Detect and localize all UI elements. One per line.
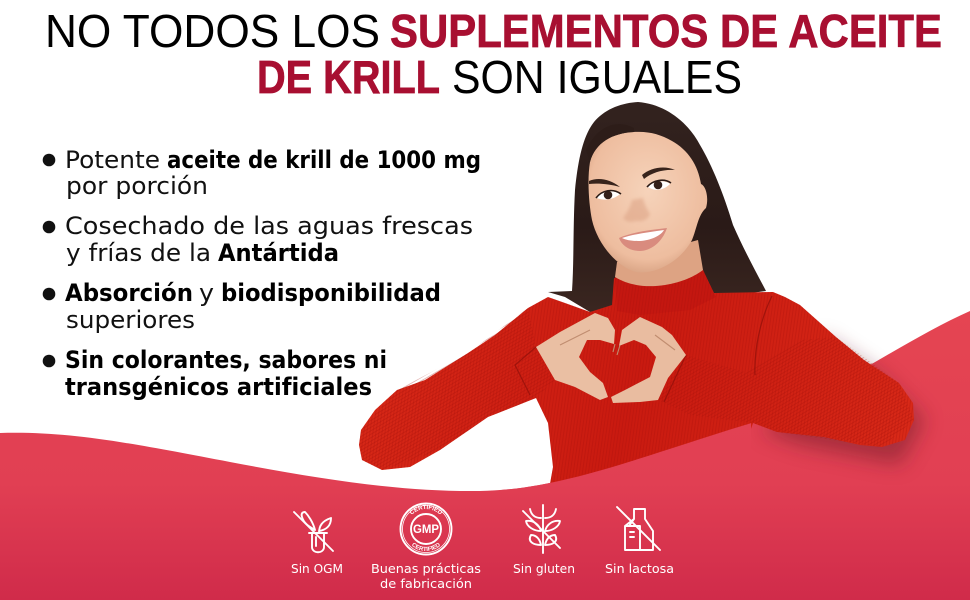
label: Sin OGM: Sin OGM xyxy=(291,561,343,576)
icon: Sin lactosa xyxy=(605,507,674,576)
eyes xyxy=(596,180,671,200)
bullet: potent krill oil: por porción xyxy=(66,172,208,200)
hands xyxy=(536,313,686,403)
title: DE KRILL xyxy=(257,51,440,103)
sleeve folds xyxy=(515,296,772,402)
eyebrows xyxy=(589,168,675,187)
benefits list xyxy=(43,146,481,401)
left sleeve ribbing xyxy=(359,308,555,470)
woman with heart hands xyxy=(359,102,914,490)
label: Buenas prácticas de fabricación: Buenas prácticas xyxy=(371,561,481,576)
bullet: no colorants: Sin colorantes, sabores ni xyxy=(65,346,387,374)
label: Buenas prácticas de fabricación xyxy=(371,561,481,591)
smile xyxy=(619,228,667,251)
bullet: absorption: superiores xyxy=(66,306,195,334)
bullet: Antarctic harvest: Antártida xyxy=(218,239,339,267)
right sleeve ribbing xyxy=(658,337,914,447)
title xyxy=(45,5,942,103)
icon: GMP seal: CERTIFIED xyxy=(410,504,442,514)
bullet: no colorants xyxy=(43,346,387,401)
wave overlap on body xyxy=(502,423,751,495)
icon: GMP seal: GMP xyxy=(413,524,439,536)
neck xyxy=(615,240,703,286)
bullet: potent krill oil xyxy=(43,146,481,200)
hair shadow at temple xyxy=(586,124,634,162)
bullet: absorption: y xyxy=(199,279,214,307)
icon row xyxy=(291,502,674,591)
bullet: Antarctic harvest xyxy=(43,212,473,267)
icon: Sin OGM xyxy=(291,512,343,576)
nose xyxy=(623,198,650,222)
label: Buenas prácticas de fabricación: de fabricación xyxy=(380,576,472,591)
sweater xyxy=(359,270,914,495)
bullet: absorption: Absorción xyxy=(65,279,193,307)
title: NO TODOS LOS xyxy=(45,5,380,57)
title: SON IGUALES xyxy=(452,51,742,103)
hair xyxy=(548,102,766,312)
bullet: Antarctic harvest: Cosechado de las aguas frescas xyxy=(65,212,473,240)
red wave background xyxy=(0,311,970,600)
arm shadow on wave xyxy=(760,335,925,465)
bullet: absorption: biodisponibilidad xyxy=(221,279,441,307)
bullet: absorption xyxy=(43,279,441,334)
icon: GMP seal: CERTIFIED xyxy=(412,543,440,551)
bullet: potent krill oil: Potente xyxy=(65,146,160,174)
turtleneck collar xyxy=(615,270,716,315)
icon: GMP seal xyxy=(371,502,481,591)
bullet: potent krill oil: aceite de krill de 1000 mg xyxy=(167,146,481,174)
bullet: Antarctic harvest: y frías de la xyxy=(66,239,211,267)
label: Sin lactosa: Sin lactosa xyxy=(605,561,674,576)
icon: Sin gluten xyxy=(513,505,575,576)
label: Sin gluten: Sin gluten xyxy=(513,561,575,576)
bullet: no colorants: transgénicos artificiales xyxy=(65,373,372,401)
face xyxy=(589,132,707,272)
